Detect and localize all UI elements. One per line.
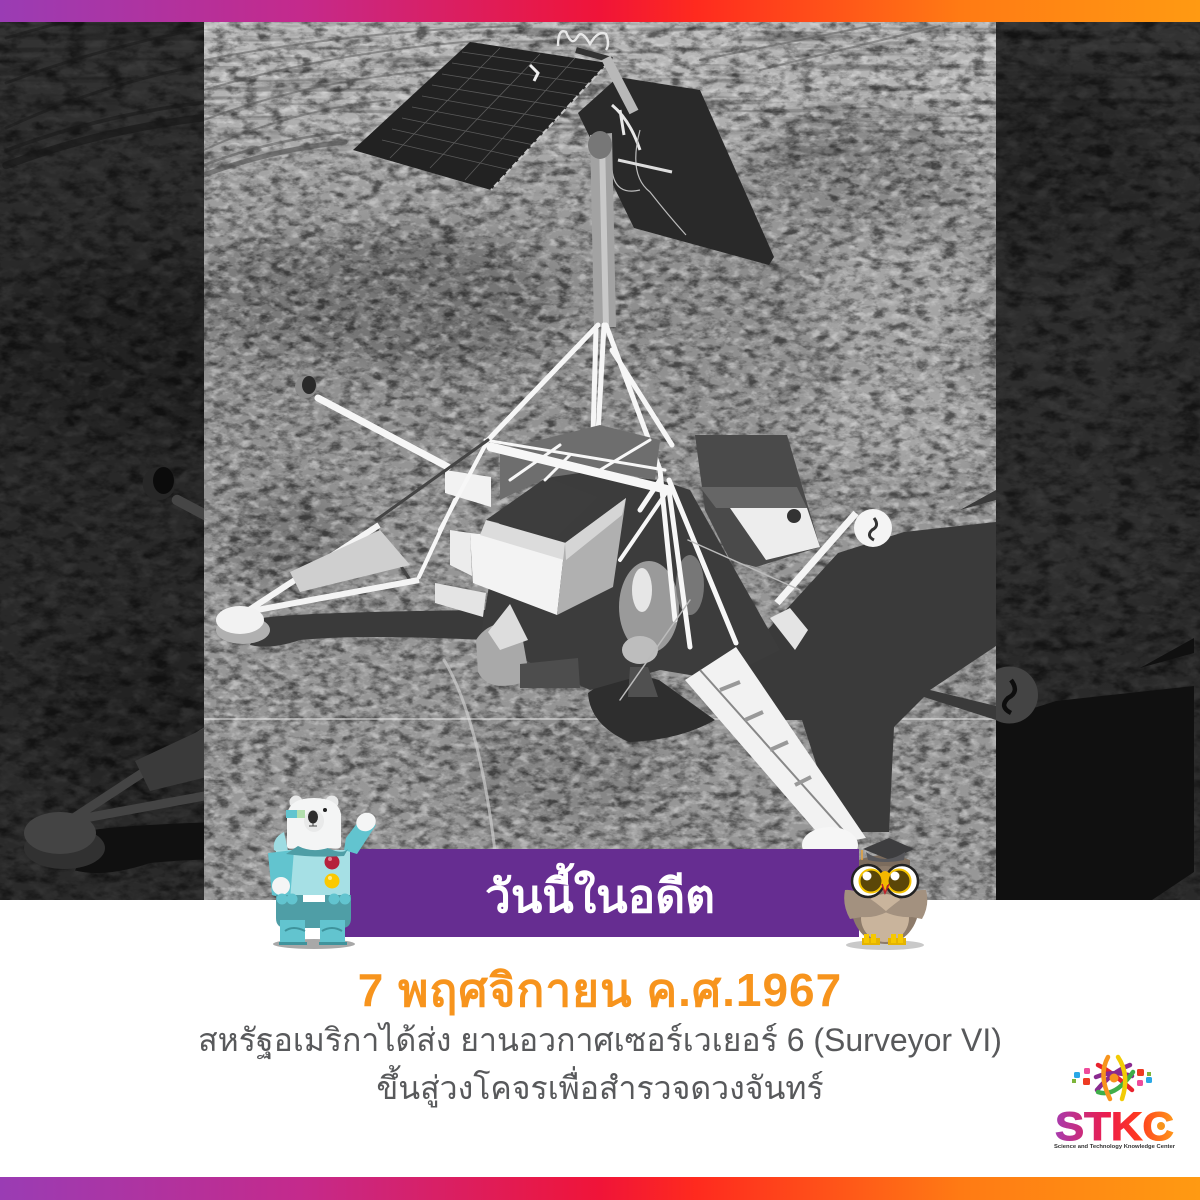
icon: owl mascot with graduation cap [844,838,928,950]
date heading: 7 พฤศจิกายน ค.ศ.1967 [358,964,842,1016]
logo: STKC [1054,1054,1176,1150]
title: วันนี้ในอดีต [485,870,715,922]
top gradient bar [0,0,1200,22]
purple title banner [345,849,859,937]
central photo [200,0,1000,864]
logo: STKC: Science and Technology Knowledge Center [1054,1144,1176,1150]
description text: สหรัฐอเมริกาได้ส่ง ยานอวกาศเซอร์เวเยอร์ 6 (Surveyor VI) [198,1022,1002,1058]
description text: ขึ้นสู่วงโคจรเพื่อสำรวจดวงจันทร์ [376,1070,824,1106]
icon: polar bear astronaut mascot [268,796,376,949]
description text [198,1022,1002,1108]
photo: Surveyor lander on lunar surface with darkened side panels [0,22,1200,900]
logo: STKC: STKC [1055,1105,1174,1149]
ground strip below photo base [204,860,996,900]
bottom gradient bar [0,1177,1200,1200]
